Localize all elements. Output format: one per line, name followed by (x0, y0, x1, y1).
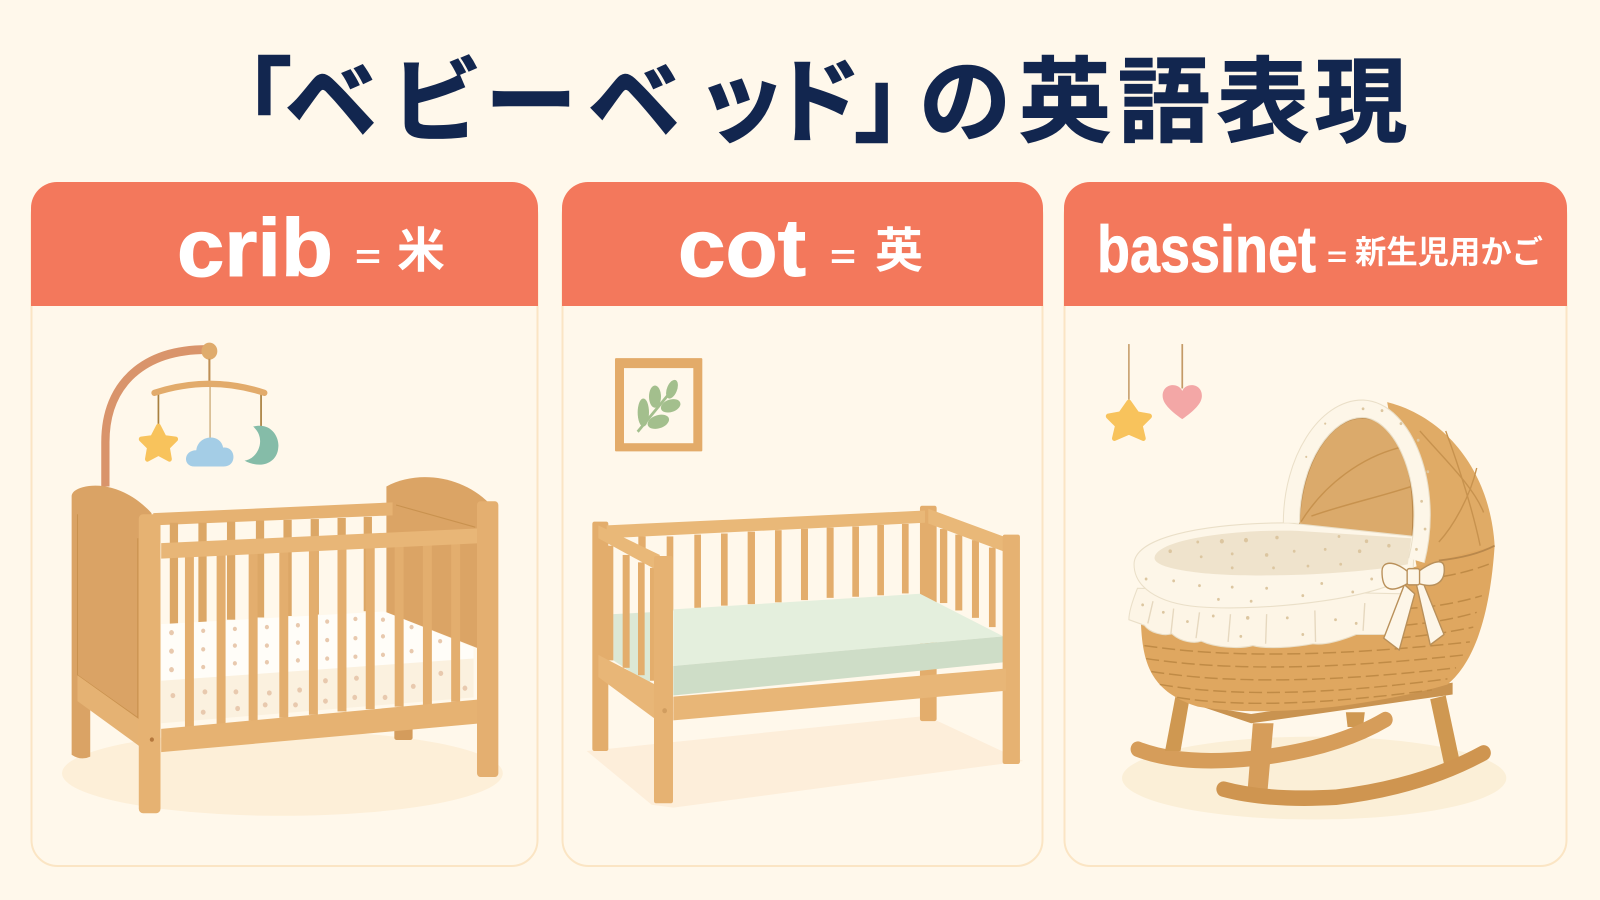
back slats (638, 524, 909, 610)
framed leaf picture (615, 358, 702, 451)
front bottom rail (673, 669, 1006, 720)
back foot (394, 725, 413, 740)
cot header band (562, 182, 1043, 306)
right headboard (386, 477, 489, 649)
title: 「ベビーベッド」の英語表現 (200, 52, 1407, 154)
mobile arm and hanger (105, 343, 264, 486)
mobile cloud (186, 438, 233, 467)
bassinet heading: bassinet (1097, 212, 1316, 286)
back rail (607, 511, 925, 538)
left headboard and rear leg (72, 486, 152, 758)
hood interior (1299, 418, 1413, 538)
mattress rim (1134, 523, 1415, 608)
left side slats (607, 546, 654, 681)
back slats (170, 517, 372, 625)
panel: crib (31, 182, 538, 866)
crib heading: crib (177, 203, 333, 294)
mobile moon (245, 426, 278, 465)
cot heading: = (830, 238, 856, 276)
bassinet card body (1064, 190, 1566, 866)
crib heading (177, 203, 445, 294)
hood back (1387, 402, 1495, 575)
ruffle (1129, 588, 1404, 648)
front left post (654, 556, 673, 803)
bassinet heading (1097, 212, 1543, 286)
crib heading: = (355, 238, 381, 276)
crib header band (31, 182, 538, 306)
panel: bassinet (1064, 182, 1567, 866)
bassinet heading: 新生児用かご (1355, 234, 1543, 270)
crib heading: 米 (397, 225, 445, 278)
left side rails (598, 525, 660, 569)
cot card body (562, 190, 1042, 866)
right front post (1003, 535, 1020, 764)
rockers and legs (1138, 683, 1484, 798)
bassinet header band (1064, 182, 1567, 306)
cot heading: 英 (875, 225, 923, 278)
fabric dots (1141, 407, 1429, 638)
back rail (153, 502, 393, 525)
mattress (613, 594, 1004, 696)
cot heading: cot (678, 203, 806, 294)
right side slats (940, 529, 996, 627)
mattress (161, 612, 474, 723)
right post (477, 501, 498, 777)
right side rail (928, 509, 1008, 553)
bassinet heading: = (1327, 241, 1347, 272)
mobile star (141, 426, 176, 459)
crib card body (32, 190, 538, 866)
front post (139, 514, 160, 813)
panel: cot (562, 182, 1043, 866)
cot heading (678, 203, 923, 294)
cot illustration (587, 358, 1023, 808)
front rails (161, 528, 481, 559)
bow (1382, 562, 1444, 650)
rear legs and posts (592, 522, 608, 751)
basket (1141, 546, 1495, 711)
hood trim (1291, 409, 1422, 560)
crib illustration (62, 343, 503, 816)
front slats (185, 543, 460, 727)
hanging heart (1163, 344, 1202, 419)
bassinet illustration (1108, 344, 1506, 820)
hanging star (1108, 344, 1150, 438)
